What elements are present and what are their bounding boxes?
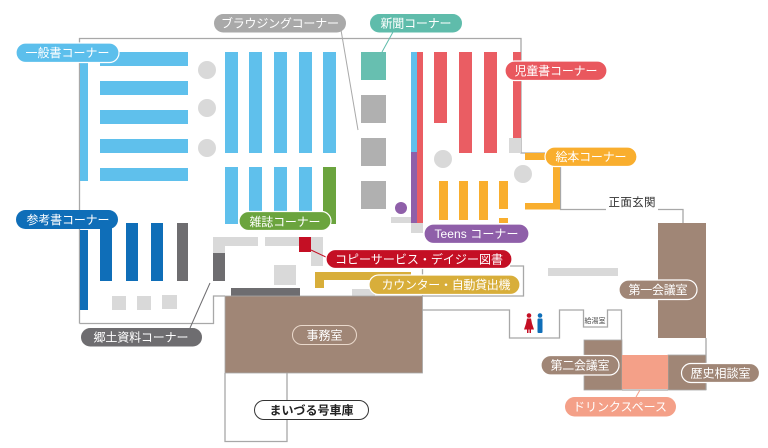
label: reference books: 参考書コーナー [26,213,110,227]
icon: women's restroom [524,313,534,333]
shelf: magazines [323,167,336,224]
drink space [622,355,668,389]
label: meeting room 1: 第一会議室 [628,283,688,297]
label: meeting room 2 [541,356,619,375]
shelves: children's books [434,52,521,153]
label: magazines: 雑誌コーナー [250,214,320,229]
shelves: wall strip [411,52,423,223]
browsing tables [361,95,386,209]
label: browsing: ブラウジングコーナー [221,16,339,30]
counter [315,272,411,288]
label: main entrance: 正面玄関 [608,196,656,209]
office room [225,296,422,373]
label: newspapers [370,14,462,32]
label: copy service [326,250,512,268]
label: bus garage: まいづる号車庫 [270,402,354,418]
label: office: 事務室 [306,328,342,342]
label: children's books [505,61,607,80]
label: drink space: ドリンクスペース [573,400,667,414]
label: drink space [565,397,676,416]
label: office [292,326,356,344]
label: general books: 一般書コーナー [26,46,110,60]
label: history consultation [682,364,760,382]
label: browsing [214,14,346,32]
icon: men's restroom [538,313,542,333]
meeting room 1 [658,223,706,338]
newspaper stand [361,52,386,80]
leader lines [190,30,640,397]
label: picture books: 絵本コーナー [556,150,626,164]
label: newspapers: 新聞コーナー [380,16,452,30]
label: copy service: コピーサービス・デイジー図書 [335,252,503,266]
shelves: reference books [80,223,188,310]
label: meeting room 1 [619,280,697,300]
label: kitchenette: 給湯室 [584,316,606,325]
tables: reference area [112,295,177,310]
local materials shelf [213,237,258,281]
label: teens: Teens コーナー [434,227,518,241]
label: history consultation: 歴史相談室 [690,366,750,380]
meeting room 2 [584,340,622,390]
label: general books [16,43,119,62]
label: bus garage [254,400,368,420]
shelves: general books [80,45,336,224]
copy machine [299,237,311,252]
teens area [391,202,423,233]
label: counter: カウンター・自動貸出機 [382,277,510,292]
label: magazines [239,212,331,230]
label: teens [424,224,529,244]
label: reference books [16,210,118,229]
label: picture books [545,147,637,166]
label: meeting room 2: 第二会議室 [550,358,610,372]
building walls [80,38,706,442]
label: local materials: 郷土資料コーナー [94,330,188,344]
label: local materials [81,328,202,346]
central fixtures [231,237,618,296]
history consultation room [668,355,706,390]
label: counter [369,275,520,294]
bottom wall of annex [622,389,668,391]
shelves: picture books [439,153,560,223]
label: children's books: 児童書コーナー [514,64,598,78]
seating circles [198,61,532,183]
